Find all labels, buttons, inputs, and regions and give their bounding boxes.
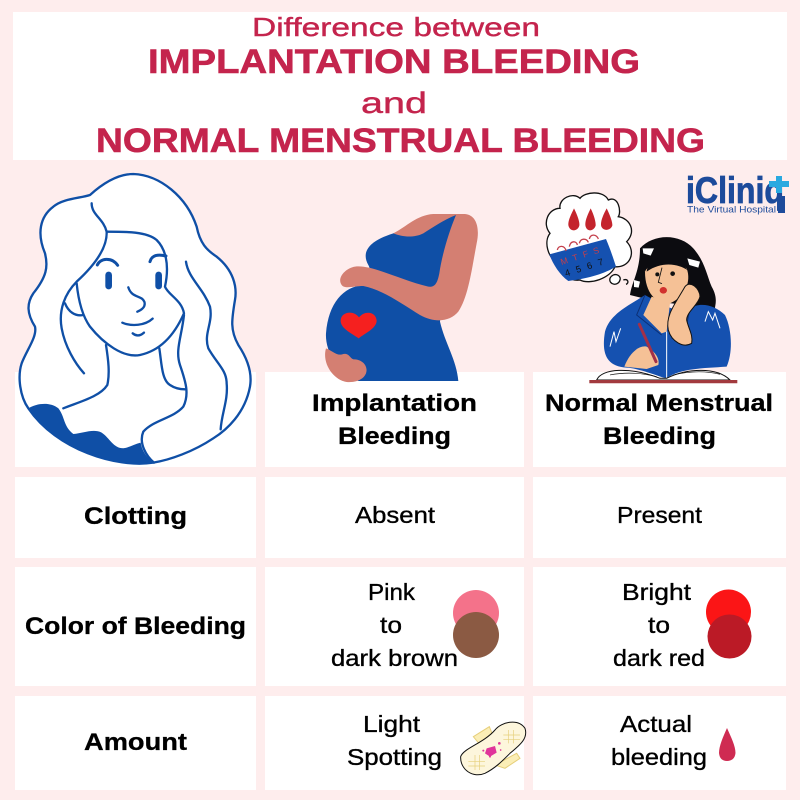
color: menstrual text	[613, 579, 705, 671]
icon: blood drop	[719, 728, 736, 761]
writing hand and pen	[624, 346, 659, 369]
logo tagline: The Virtual Hospital	[687, 204, 776, 216]
open book	[597, 370, 730, 380]
small bubbles	[610, 275, 620, 284]
eyes, nose and mouth	[655, 272, 659, 276]
shirt	[604, 295, 731, 378]
icon: sanitary pad	[461, 722, 526, 775]
row: color of bleeding	[25, 579, 752, 671]
logo plus sign	[769, 176, 789, 193]
eyes	[99, 275, 119, 286]
collar lines	[637, 295, 690, 338]
row: amount	[84, 711, 736, 775]
title panel	[13, 12, 787, 160]
hair and face lines	[61, 203, 107, 373]
row: color of bleeding: Color of Bleeding	[25, 613, 246, 640]
amount: implantation text	[347, 711, 442, 770]
color: menstrual text: to	[648, 612, 670, 638]
title line: and: and	[361, 87, 427, 120]
clotting: menstrual: Present	[617, 502, 703, 528]
row: clotting: Clotting	[84, 503, 187, 530]
column heading: implantation bleeding: Implantation	[312, 390, 477, 417]
color: implantation text: to	[380, 612, 402, 638]
color swatches: bright to dark red	[706, 590, 752, 658]
column heading: normal menstrual bleeding: Normal Menstrual	[545, 390, 773, 417]
column heading: normal menstrual bleeding	[545, 390, 773, 450]
illustration: pregnant figure	[325, 214, 478, 382]
amount: menstrual text: Actual	[620, 711, 692, 737]
row: amount: Amount	[84, 729, 187, 756]
color: menstrual text: Bright	[622, 579, 692, 605]
title line: normal menstrual bleeding: NORMAL MENSTRUAL BLEEDING	[96, 122, 705, 160]
thought bubble	[546, 193, 632, 284]
title line: implantation bleeding: IMPLANTATION BLEEDING	[148, 43, 640, 81]
row: clotting	[84, 502, 703, 530]
neck	[643, 297, 670, 333]
heart	[341, 313, 377, 338]
hand on cheek	[668, 284, 700, 345]
illustration: woman portrait	[20, 174, 251, 464]
illustration: thinking woman	[546, 193, 737, 383]
fringe	[647, 257, 687, 272]
column heading: implantation bleeding: Bleeding	[338, 423, 451, 450]
amount: menstrual text: bleeding	[611, 744, 707, 770]
dress	[326, 214, 458, 381]
clotting: implantation: Absent	[355, 502, 436, 528]
color: implantation text	[331, 579, 458, 671]
title line: difference between: Difference between	[252, 12, 540, 42]
column heading: implantation bleeding	[312, 390, 477, 450]
calendar	[549, 239, 616, 281]
amount: menstrual text	[611, 711, 707, 770]
color: implantation text: dark brown	[331, 645, 458, 671]
logo: iCliniq: iCliniq	[686, 170, 784, 211]
color: menstrual text: dark red	[613, 645, 705, 671]
face	[645, 262, 688, 303]
color: implantation text: Pink	[368, 579, 416, 605]
thought bubble: M T F S	[559, 245, 601, 267]
amount: implantation text: Light	[363, 711, 421, 737]
hair	[630, 237, 716, 308]
color swatches: pink to brown	[453, 590, 499, 658]
column heading: normal menstrual bleeding: Bleeding	[603, 423, 716, 450]
lower hand	[325, 348, 367, 382]
amount: implantation text: Spotting	[347, 744, 442, 770]
blood drops	[568, 208, 579, 230]
table cell backgrounds	[15, 372, 786, 790]
shoulder and arm	[340, 214, 478, 320]
clothing	[28, 404, 154, 464]
thought bubble: 4 5 6 7	[564, 257, 605, 279]
